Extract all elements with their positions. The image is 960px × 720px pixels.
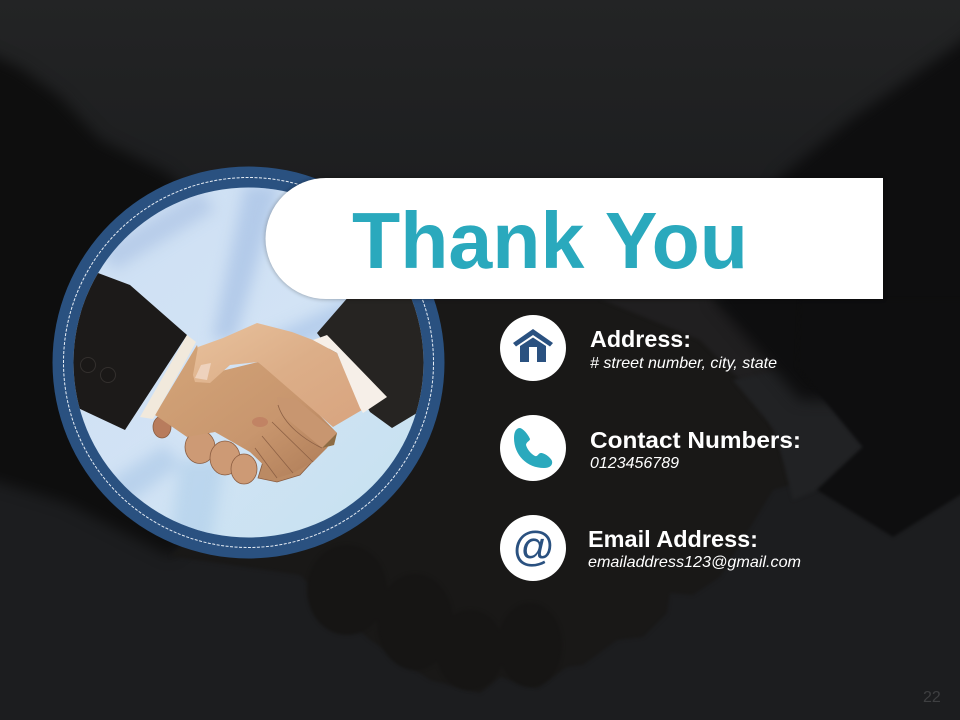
upper hand and thumb bbox=[193, 323, 362, 427]
email heading: Email Address: bbox=[588, 526, 758, 552]
ghost right sleeve lower bbox=[797, 300, 960, 537]
finger creases bbox=[255, 405, 322, 478]
icon: at sign: @ bbox=[512, 523, 554, 570]
phone number: 0123456789 bbox=[590, 455, 679, 472]
icon: house bbox=[500, 315, 566, 381]
index finger bbox=[298, 416, 337, 448]
icon: at sign bbox=[500, 515, 566, 581]
suit buttons bbox=[80, 358, 116, 382]
ghost fingers bbox=[307, 545, 562, 690]
photo bbox=[60, 185, 430, 545]
frame ring bbox=[52, 166, 444, 558]
left shirt cuff bbox=[140, 335, 196, 419]
contact numbers heading: Contact Numbers: bbox=[590, 427, 801, 453]
lower hand bbox=[155, 345, 337, 464]
ghost hands bbox=[170, 299, 840, 693]
address details: # street number, city, state bbox=[590, 355, 777, 372]
left suit sleeve bbox=[74, 273, 187, 430]
right shirt cuff bbox=[313, 335, 387, 413]
ghost right sleeve upper bbox=[713, 0, 960, 400]
address heading: Address: bbox=[590, 326, 691, 352]
circular handshake photo frame bbox=[52, 166, 444, 558]
contact: email bbox=[500, 515, 801, 581]
contact: phone numbers bbox=[500, 415, 801, 481]
icon: telephone bbox=[500, 415, 566, 481]
email address: emailaddress123@gmail.com bbox=[588, 554, 801, 571]
contact: address bbox=[500, 315, 777, 381]
ghost left sleeve bbox=[0, 40, 430, 556]
title: Thank You bbox=[352, 196, 748, 285]
ghost right cuff bbox=[733, 367, 863, 500]
lower fingers bbox=[153, 416, 312, 484]
dashed stitch ring bbox=[64, 178, 434, 548]
right suit sleeve bbox=[317, 295, 430, 428]
page number: 22 bbox=[923, 689, 941, 706]
title banner bbox=[266, 178, 883, 299]
